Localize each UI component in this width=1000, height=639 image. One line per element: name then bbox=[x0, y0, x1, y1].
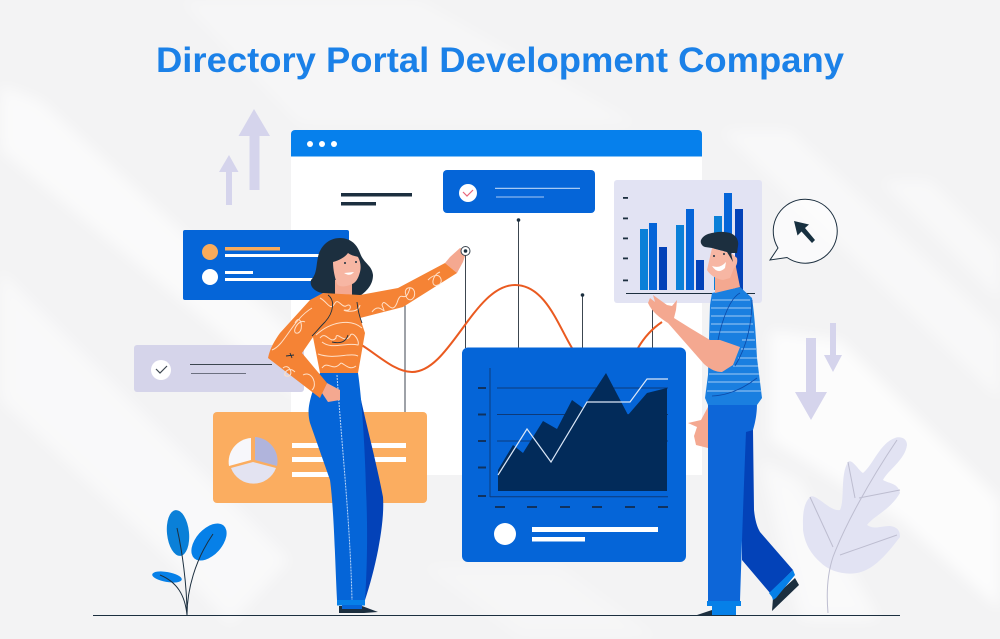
shoe bbox=[339, 606, 378, 613]
orange trend curve bbox=[360, 285, 662, 372]
chart legend bbox=[494, 523, 658, 545]
icon: speech bubble with cursor arrow bbox=[770, 199, 837, 263]
neck bbox=[335, 280, 352, 296]
shirt seams bbox=[712, 293, 757, 396]
card: top check card bbox=[443, 170, 595, 213]
pant cuff bbox=[337, 600, 365, 606]
card: grey check card bbox=[134, 345, 304, 392]
striped shirt bbox=[705, 287, 762, 405]
sweater seam lines bbox=[286, 295, 362, 358]
raised hand bbox=[445, 248, 467, 273]
face bbox=[707, 248, 737, 280]
target ring bbox=[461, 246, 470, 256]
chart tick marks bbox=[478, 387, 668, 508]
figure: woman bbox=[268, 238, 470, 613]
connector lines bbox=[405, 218, 652, 412]
left hand bbox=[322, 383, 340, 402]
pie chart bbox=[229, 437, 278, 484]
card: orange pie chart card bbox=[213, 412, 427, 503]
chart axes and grid bbox=[490, 368, 668, 497]
browser window bbox=[291, 130, 702, 475]
orange sweater bbox=[268, 263, 457, 398]
dark pant leg bbox=[345, 374, 383, 600]
icon: down arrows bbox=[795, 323, 842, 420]
hair bbox=[701, 232, 738, 262]
face bbox=[333, 253, 361, 286]
front cuff and shoe bbox=[697, 601, 741, 616]
ground line bbox=[93, 615, 900, 616]
panel: bar chart bbox=[614, 180, 762, 303]
white line series bbox=[498, 379, 668, 475]
arm and raised hand bbox=[648, 295, 740, 372]
panel: main area chart bbox=[462, 348, 686, 562]
neck bbox=[715, 262, 740, 293]
sweater pattern bbox=[272, 272, 441, 390]
icon: pale leaf bbox=[803, 437, 907, 613]
card: blue list card bbox=[183, 230, 349, 300]
title: Directory Portal Development Company bbox=[156, 41, 845, 80]
icon: left blue plant bbox=[151, 509, 233, 615]
figure: man bbox=[648, 232, 799, 616]
icon: up arrows bbox=[219, 109, 270, 205]
lower hand bbox=[688, 407, 708, 448]
front pant leg bbox=[708, 403, 757, 601]
hair bbox=[311, 238, 373, 296]
back cuff and shoe bbox=[769, 570, 799, 611]
light pant leg bbox=[309, 373, 367, 600]
dark area series bbox=[498, 373, 667, 491]
window header bar bbox=[291, 130, 702, 156]
window text lines bbox=[341, 193, 412, 206]
back pant leg bbox=[742, 420, 793, 593]
